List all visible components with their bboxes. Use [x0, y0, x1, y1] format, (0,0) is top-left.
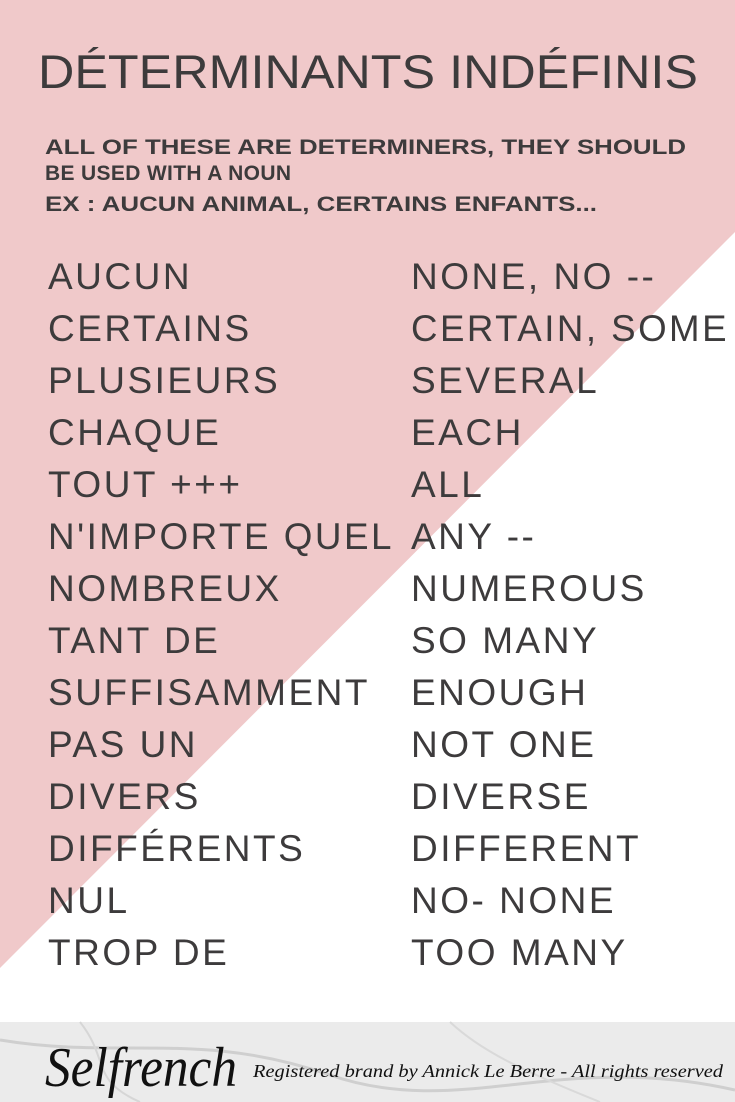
english column: NONE, NO -- — [411, 256, 656, 297]
subtitle text block: EX : AUCUN ANIMAL, CERTAINS ENFANTS... — [45, 193, 597, 216]
subtitle text block: BE USED WITH A NOUN — [45, 162, 291, 185]
french column: DIVERS — [48, 776, 201, 817]
french column: TOUT +++ — [48, 464, 242, 505]
english column: ALL — [411, 464, 484, 505]
english column: NOT ONE — [411, 724, 596, 765]
french column: NOMBREUX — [48, 568, 282, 609]
english column: TOO MANY — [411, 932, 628, 973]
french column: TANT DE — [48, 620, 220, 661]
english column: EACH — [411, 412, 524, 453]
french column: N'IMPORTE QUEL — [48, 516, 394, 557]
french column: PAS UN — [48, 724, 198, 765]
footer credit: Registered brand by Annick Le Berre - All rights reserved — [252, 1061, 724, 1081]
french column: TROP DE — [48, 932, 229, 973]
french column: SUFFISAMMENT — [48, 672, 370, 713]
title: DÉTERMINANTS INDÉFINIS — [38, 45, 698, 98]
english column: NO- NONE — [411, 880, 616, 921]
french column: AUCUN — [48, 256, 192, 297]
subtitle text block: ALL OF THESE ARE DETERMINERS, THEY SHOULD — [45, 136, 686, 159]
french column: DIFFÉRENTS — [48, 828, 305, 869]
french column: CERTAINS — [48, 308, 252, 349]
english column: NUMEROUS — [411, 568, 647, 609]
english column: DIFFERENT — [411, 828, 641, 869]
english column: CERTAIN, SOME — [411, 308, 729, 349]
english column: SEVERAL — [411, 360, 599, 401]
footer brand: Selfrench — [45, 1037, 237, 1099]
english column: SO MANY — [411, 620, 599, 661]
english column: DIVERSE — [411, 776, 591, 817]
subtitle text block — [45, 136, 686, 216]
french column: PLUSIEURS — [48, 360, 280, 401]
french column: NUL — [48, 880, 130, 921]
english column: ENOUGH — [411, 672, 588, 713]
french column — [48, 256, 394, 973]
footer marble band — [0, 1022, 735, 1102]
english column — [411, 256, 729, 973]
english column: ANY -- — [411, 516, 536, 557]
french column: CHAQUE — [48, 412, 221, 453]
